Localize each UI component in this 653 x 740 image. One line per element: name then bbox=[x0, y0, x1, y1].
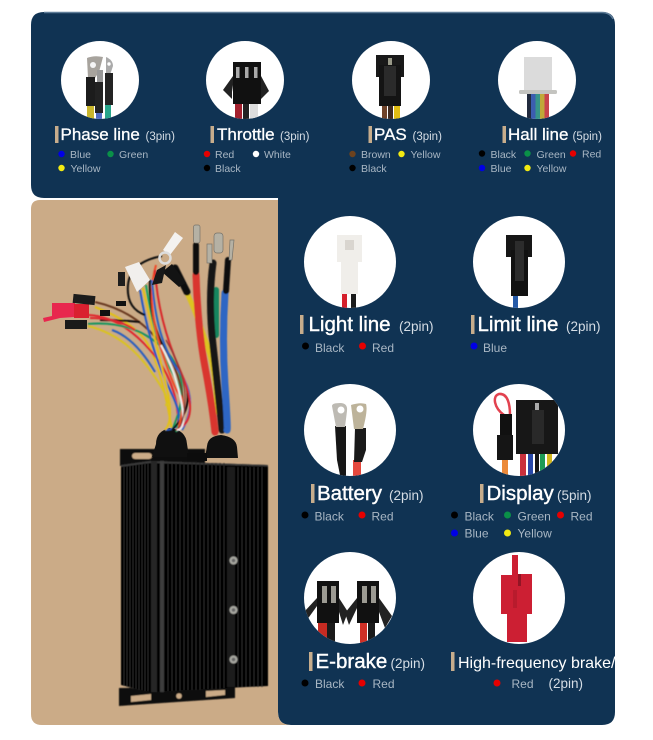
colour legend bbox=[349, 149, 441, 175]
card: PAS bbox=[349, 41, 442, 175]
card: E-brake bbox=[302, 552, 425, 691]
colour legend: Red bbox=[582, 148, 601, 160]
colour legend bbox=[204, 149, 291, 175]
card: Display bbox=[451, 384, 593, 540]
colour legend: Red bbox=[372, 510, 394, 524]
colour legend: Red bbox=[372, 677, 395, 691]
colour legend: White bbox=[264, 149, 291, 161]
icon: PAS connector bbox=[352, 41, 430, 119]
card: Hall line bbox=[479, 41, 602, 175]
pin count: (2pin) bbox=[548, 676, 583, 691]
colour legend bbox=[302, 677, 395, 691]
label bar bbox=[502, 126, 506, 143]
colour legend: Green bbox=[536, 149, 566, 161]
pin count: (3pin) bbox=[146, 131, 175, 143]
colour legend: Green bbox=[518, 510, 551, 524]
colour legend bbox=[451, 510, 593, 540]
colour legend: Black bbox=[315, 677, 345, 691]
label bar bbox=[300, 315, 304, 334]
icon: light line connector bbox=[304, 216, 396, 310]
label bar bbox=[210, 126, 214, 143]
pin count: (3pin) bbox=[412, 131, 442, 143]
colour legend: Blue bbox=[464, 526, 489, 540]
illustration: thin signal wires bbox=[88, 256, 190, 432]
colour legend: Yellow bbox=[410, 149, 441, 161]
icon: e-brake connectors bbox=[304, 552, 396, 645]
illustration: terminal lugs bbox=[194, 225, 234, 263]
colour legend: Yellow bbox=[536, 163, 567, 175]
card: Battery bbox=[302, 384, 424, 524]
card: Phase line bbox=[55, 41, 175, 175]
colour legend: Black bbox=[315, 341, 345, 355]
colour legend: Red bbox=[570, 510, 593, 524]
icon: hall line connector bbox=[498, 41, 576, 119]
heading: Battery bbox=[317, 482, 383, 505]
card: Light line bbox=[300, 216, 434, 355]
icon: battery connector bbox=[304, 384, 396, 480]
label bar bbox=[311, 484, 314, 503]
colour legend bbox=[302, 510, 394, 524]
colour legend: Yellow bbox=[518, 526, 552, 540]
colour legend: Black bbox=[464, 510, 495, 524]
colour legend bbox=[494, 677, 534, 691]
colour legend: Black bbox=[490, 149, 517, 161]
heading: Limit line bbox=[478, 313, 558, 336]
card: High-frequency brake bbox=[451, 552, 616, 691]
pin count: (5pin) bbox=[572, 131, 602, 143]
colour legend: Red bbox=[215, 149, 234, 161]
heading: High-frequency brake/ bbox=[458, 655, 616, 672]
colour legend: Red bbox=[372, 341, 394, 355]
icon: high-frequency brake connector bbox=[473, 552, 565, 644]
colour legend bbox=[479, 148, 601, 175]
card: Throttle bbox=[204, 41, 310, 175]
colour legend: Black bbox=[314, 510, 345, 524]
illustration: cable glands bbox=[152, 428, 238, 461]
card: Limit line bbox=[470, 216, 601, 355]
colour legend: Blue bbox=[490, 163, 512, 175]
pin count: (2pin) bbox=[566, 319, 601, 334]
illustration: thick phase and battery wires bbox=[175, 245, 228, 432]
colour legend: Black bbox=[215, 163, 241, 175]
colour legend: Green bbox=[119, 149, 148, 161]
colour legend: Blue bbox=[483, 341, 507, 355]
heading: Throttle bbox=[217, 125, 275, 144]
colour legend: Black bbox=[361, 163, 387, 175]
panel: controller photo background bbox=[31, 200, 291, 725]
pin count: (2pin) bbox=[390, 656, 425, 671]
icon: limit line connector bbox=[473, 216, 565, 310]
heading: Phase line bbox=[60, 125, 140, 144]
colour legend: Red bbox=[512, 677, 534, 691]
icon: display connector bbox=[473, 384, 565, 482]
heading: Display bbox=[486, 482, 554, 505]
colour legend bbox=[302, 341, 394, 355]
colour legend bbox=[58, 149, 148, 175]
icon: phase line connector bbox=[61, 41, 139, 120]
colour legend: Brown bbox=[361, 149, 391, 161]
label bar bbox=[480, 484, 484, 503]
pin count: (3pin) bbox=[280, 131, 310, 143]
pin count: (2pin) bbox=[389, 488, 424, 503]
heading: Light line bbox=[308, 313, 391, 336]
colour legend: Yellow bbox=[70, 163, 101, 175]
heading: E-brake bbox=[316, 650, 387, 673]
pin count: (2pin) bbox=[399, 319, 434, 334]
label bar bbox=[368, 126, 372, 143]
label bar bbox=[309, 652, 312, 671]
label bar bbox=[451, 652, 454, 671]
illustration: small connectors bbox=[43, 232, 186, 329]
pin count: (5pin) bbox=[557, 488, 592, 503]
illustration: controller box bbox=[119, 449, 268, 706]
colour legend: Blue bbox=[70, 149, 91, 161]
heading: PAS bbox=[374, 125, 407, 144]
heading: Hall line bbox=[508, 125, 568, 144]
label bar bbox=[55, 126, 58, 143]
icon: throttle connector bbox=[206, 41, 284, 119]
label bar bbox=[471, 315, 474, 334]
